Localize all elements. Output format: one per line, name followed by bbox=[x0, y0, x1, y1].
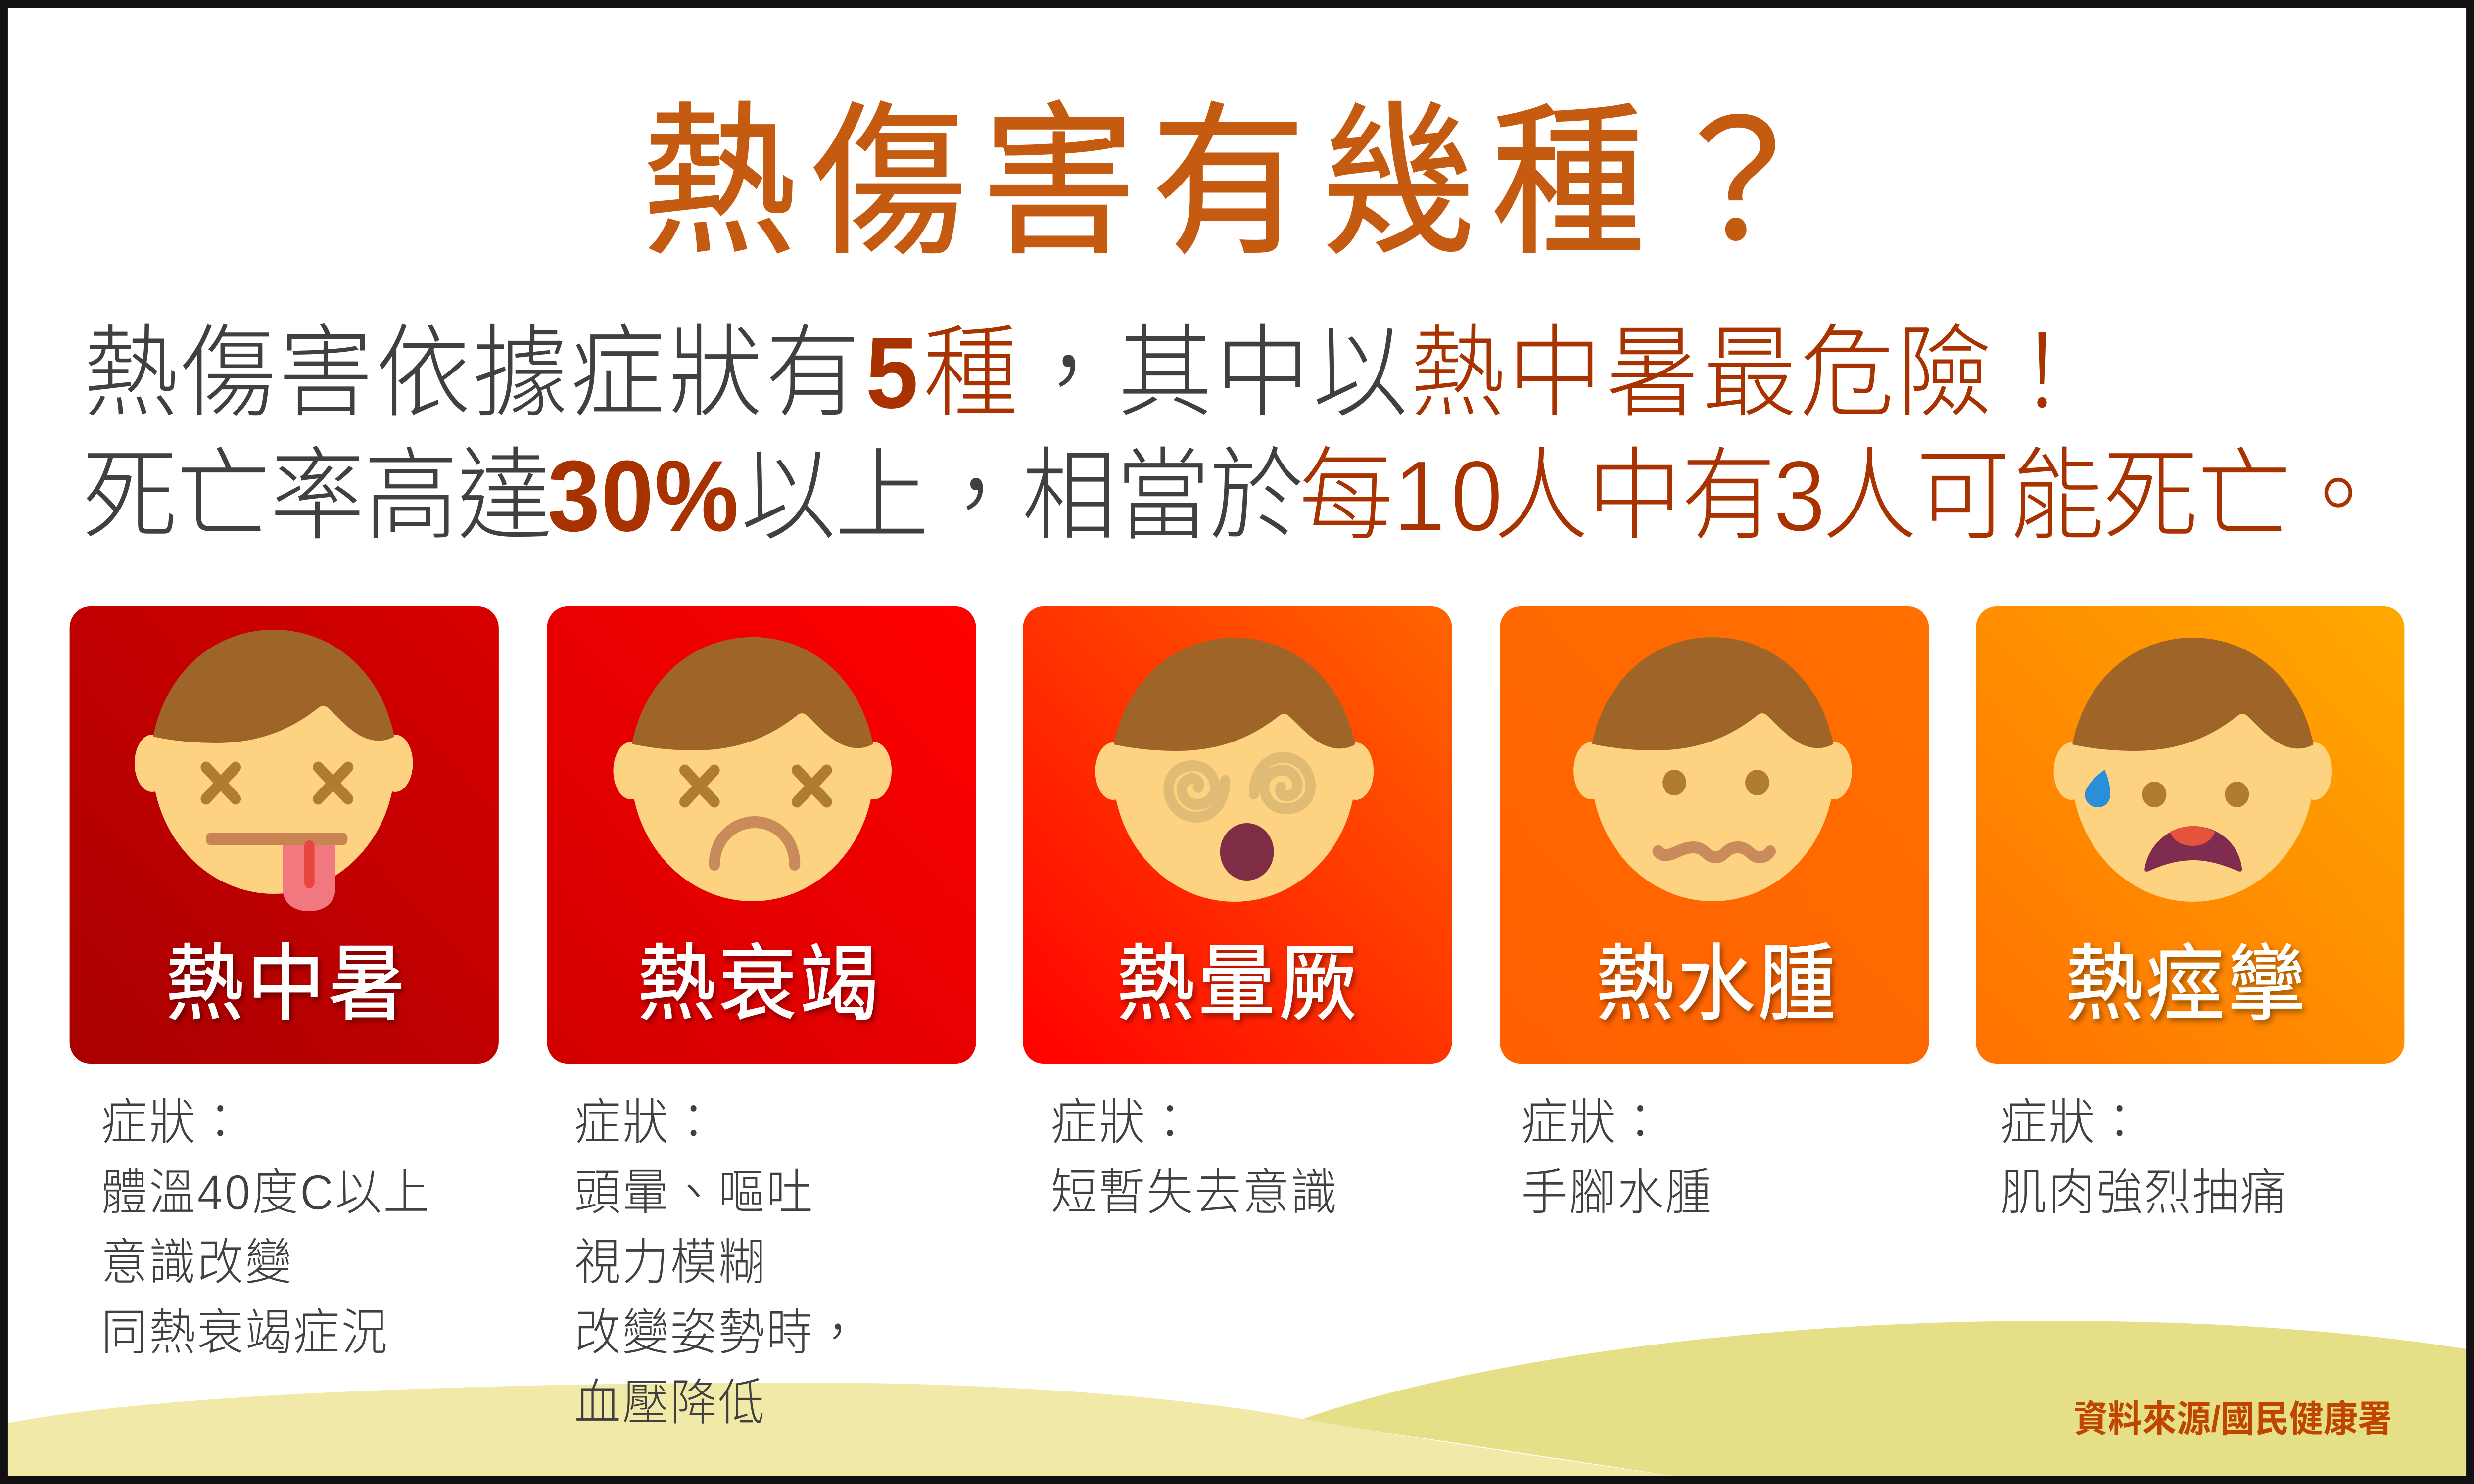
intro line 2: 以上，相當於 bbox=[741, 439, 1303, 552]
symptoms: 熱水腫: 手腳水腫 bbox=[1521, 1164, 1713, 1220]
panel: 熱痙攣 bbox=[1976, 606, 2404, 1064]
intro line 2: 3 bbox=[1773, 439, 1830, 552]
intro line 2: 人可能死亡。 bbox=[1822, 439, 2384, 552]
symptoms: 熱痙攣: 肌肉強烈抽痛 bbox=[2000, 1164, 2288, 1220]
symptoms: 熱衰竭: 改變姿勢時， bbox=[574, 1304, 862, 1360]
icon: face with wavy mouth bbox=[1573, 637, 1852, 901]
symptoms: 熱中暑: 同熱衰竭症況 bbox=[101, 1304, 389, 1360]
symptoms: 熱衰竭: 血壓降低 bbox=[574, 1375, 766, 1431]
intro line 1: 熱傷害依據症狀有 bbox=[84, 316, 863, 429]
symptoms: 熱衰竭: 視力模糊 bbox=[574, 1234, 766, 1290]
panel: 熱中暑 bbox=[70, 606, 499, 1064]
icon: dizzy face with spiral eyes bbox=[1095, 638, 1374, 902]
label: 熱痙攣 bbox=[2065, 916, 2309, 1036]
label: 熱衰竭 bbox=[637, 916, 881, 1036]
intro line 2: 10 bbox=[1393, 439, 1508, 552]
source credit: 資料來源/國民健康署 bbox=[2074, 1399, 2392, 1440]
symptoms: 熱中暑: 意識改變 bbox=[101, 1234, 293, 1290]
symptoms: 熱痙攣: 症狀： bbox=[2000, 1094, 2144, 1150]
intro line 2: 30% bbox=[547, 439, 740, 552]
label: 熱中暑 bbox=[166, 916, 409, 1036]
symptoms: 熱中暑: 40度C以上 bbox=[197, 1164, 431, 1220]
intro line 1: 熱中暑最危險！ bbox=[1410, 316, 2092, 429]
background hills bbox=[8, 1321, 2466, 1476]
intro line 1: ，其中以 bbox=[1021, 316, 1410, 429]
panel: 熱暈厥 bbox=[1023, 606, 1452, 1064]
intro line 2: 人中有 bbox=[1494, 439, 1775, 552]
symptoms: 熱衰竭: 症狀： bbox=[574, 1094, 718, 1150]
title: 熱傷害有幾種？ bbox=[642, 49, 1831, 287]
panel: 熱水腫 bbox=[1500, 606, 1929, 1064]
icon: sweating face with open frown bbox=[2054, 638, 2332, 902]
symptoms: 熱中暑: 體溫 bbox=[101, 1164, 197, 1220]
icon: face with x eyes and frown bbox=[613, 637, 892, 901]
label: 熱暈厥 bbox=[1117, 916, 1360, 1036]
label: 熱水腫 bbox=[1596, 916, 1839, 1036]
symptoms: 熱中暑: 症狀： bbox=[101, 1094, 245, 1150]
symptoms: 熱衰竭: 頭暈、嘔吐 bbox=[574, 1164, 814, 1220]
intro line 2: 每 bbox=[1299, 439, 1393, 552]
intro line 2: 死亡率高達 bbox=[83, 439, 551, 552]
panel: 熱衰竭 bbox=[547, 606, 976, 1064]
symptoms: 熱水腫: 症狀： bbox=[1521, 1094, 1665, 1150]
symptoms: 熱暈厥: 症狀： bbox=[1051, 1094, 1195, 1150]
symptoms: 熱暈厥: 短暫失去意識 bbox=[1051, 1164, 1339, 1220]
icon: face with x eyes and tongue bbox=[135, 630, 413, 911]
intro text bbox=[83, 316, 2384, 552]
intro line 1: 5 bbox=[865, 316, 921, 429]
intro line 1: 種 bbox=[923, 316, 1021, 429]
